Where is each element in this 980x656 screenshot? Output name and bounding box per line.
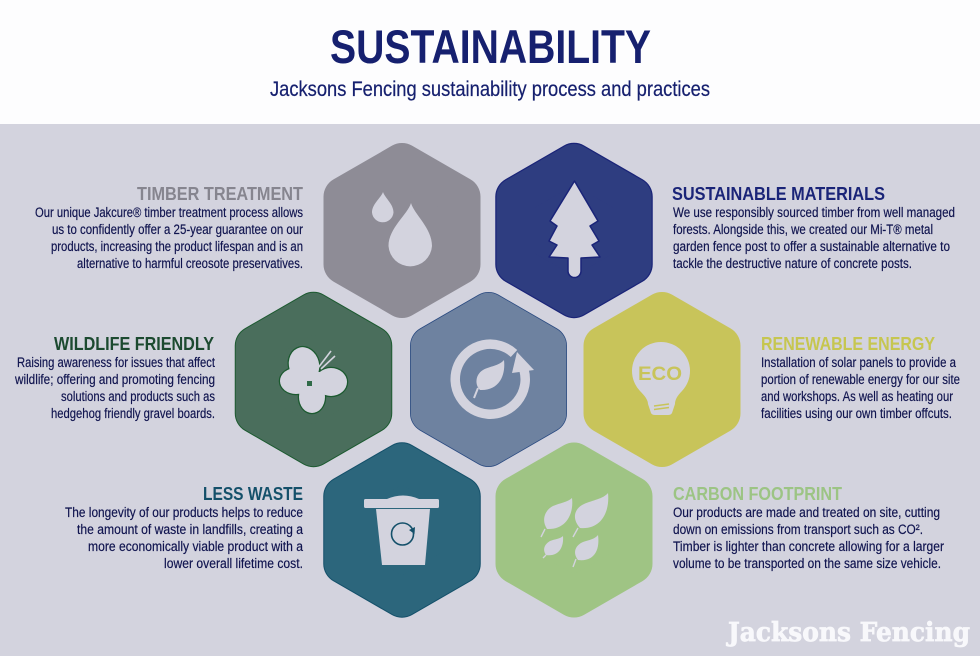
hexagon: less waste [344, 462, 460, 598]
body: wildlife friendly: solutions and products such as [61, 389, 215, 404]
body: sustainable materials [673, 205, 955, 271]
body: less waste: the amount of waste in landfills, creating a [77, 522, 303, 537]
heading: renewable energy: RENEWABLE ENERGY [761, 333, 936, 354]
body: timber treatment: Our unique Jakcure® timber treatment process allows [35, 205, 303, 220]
heading: wildlife friendly: WILDLIFE FRIENDLY [54, 333, 215, 354]
body: less waste: lower overall lifetime cost. [164, 556, 303, 571]
heading: less waste: LESS WASTE [203, 483, 303, 504]
text block: wildlife friendly [14, 333, 215, 421]
hexagon: carbon footprint [516, 462, 632, 598]
icon: butterfly [280, 344, 347, 413]
icon: four leaves [541, 493, 608, 567]
text block: carbon footprint [673, 483, 944, 571]
body: carbon footprint: volume to be transported on the same size vehicle. [673, 556, 941, 571]
body: timber treatment [35, 205, 303, 271]
body: carbon footprint: Timber is lighter than concrete allowing for a larger [673, 539, 944, 554]
body: sustainable materials: tackle the destructive nature of concrete posts. [673, 256, 912, 271]
hexagon: sustainable materials [516, 163, 632, 298]
body: wildlife friendly [14, 355, 215, 421]
body: carbon footprint: down on emissions from transport such as CO². [673, 522, 923, 537]
header band [0, 0, 980, 124]
text block: less waste [65, 483, 303, 571]
icon: water drops [372, 192, 432, 266]
heading: timber treatment: TIMBER TREATMENT [137, 183, 304, 204]
body: timber treatment: products, increasing the product lifespan and is an [51, 239, 303, 254]
title: SUSTAINABILITY [330, 20, 651, 73]
heading: sustainable materials: SUSTAINABLE MATERIALS [672, 183, 885, 204]
body: renewable energy [761, 355, 960, 421]
body: wildlife friendly: wildlife; offering and promoting fencing [14, 372, 215, 387]
body: sustainable materials: forests. Alongside this, we created our Mi-T® metal [673, 222, 933, 237]
body: wildlife friendly: hedgehog friendly gravel boards. [51, 406, 215, 421]
icon: pine tree [549, 181, 600, 278]
logo: Jacksons Fencing: Jacksons Fencing [726, 618, 970, 648]
body: carbon footprint: Our products are made and treated on site, cutting [673, 505, 940, 520]
text block: timber treatment [35, 183, 304, 271]
hexagon: wildlife friendly [255, 312, 372, 447]
subtitle: Jacksons Fencing sustainability process and practices [270, 78, 710, 101]
body: renewable energy: facilities using our own timber offcuts. [761, 406, 952, 421]
body: timber treatment: us to confidently offer a 25-year guarantee on our [52, 222, 303, 237]
body: timber treatment: alternative to harmful creosote preservatives. [77, 256, 303, 271]
body: less waste [65, 505, 303, 571]
heading: carbon footprint: CARBON FOOTPRINT [673, 483, 843, 504]
body: wildlife friendly: Raising awareness for issues that affect [17, 355, 215, 370]
text block: sustainable materials [672, 183, 955, 271]
body: less waste: The longevity of our products helps to reduce [65, 505, 303, 520]
hexagon: timber treatment [344, 163, 460, 298]
hexagon: centre recycle [430, 312, 547, 447]
icon: recycling arrow with leaf [455, 344, 534, 414]
hexagon: renewable energy [604, 312, 720, 447]
text block: renewable energy [761, 333, 960, 421]
body: less waste: more economically viable product with a [88, 539, 303, 554]
icon: eco light bulb: ECO [638, 364, 682, 385]
icon: recycling bin [364, 496, 439, 565]
body: carbon footprint [673, 505, 944, 571]
